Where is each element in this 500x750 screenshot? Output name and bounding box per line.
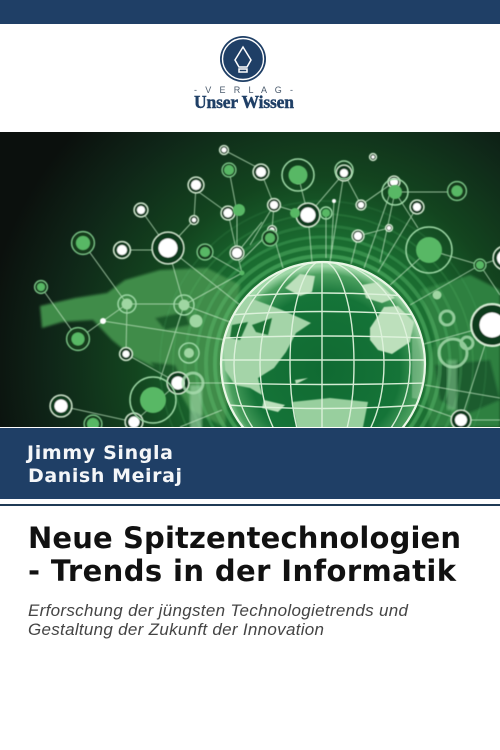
subtitle: Erforschung der jüngsten Technologietrends und <box>28 601 409 620</box>
cover image: network and globe <box>0 132 500 427</box>
band underline <box>0 504 500 506</box>
globe <box>222 263 424 427</box>
continents <box>223 274 426 432</box>
book title: - Trends in der Informatik <box>28 554 457 588</box>
connection lines <box>41 150 500 427</box>
dark inlets <box>230 318 272 340</box>
author band <box>0 428 500 499</box>
publisher logo <box>194 36 294 112</box>
latitude and longitude grid <box>222 263 424 427</box>
subtitle <box>28 601 409 639</box>
author: Danish Meiraj: Danish Meiraj <box>28 465 182 487</box>
world map backdrop <box>40 268 500 427</box>
logo emblem: pen nib <box>220 36 266 82</box>
network nodes: green <box>34 159 486 433</box>
logo text: Unser Wissen: Unser Wissen <box>194 92 294 112</box>
light beams <box>190 385 202 430</box>
logo text: Verlag: - V E R L A G - <box>194 85 293 95</box>
network nodes: white <box>50 146 500 431</box>
concentric rings <box>160 200 486 427</box>
top navy bar <box>0 0 500 24</box>
author: Jimmy Singla: Jimmy Singla <box>25 442 173 464</box>
subtitle: Gestaltung der Zukunft der Innovation <box>28 620 324 639</box>
globe rim <box>220 260 426 427</box>
book title <box>28 521 461 588</box>
book title: Neue Spitzentechnologien <box>28 521 461 555</box>
